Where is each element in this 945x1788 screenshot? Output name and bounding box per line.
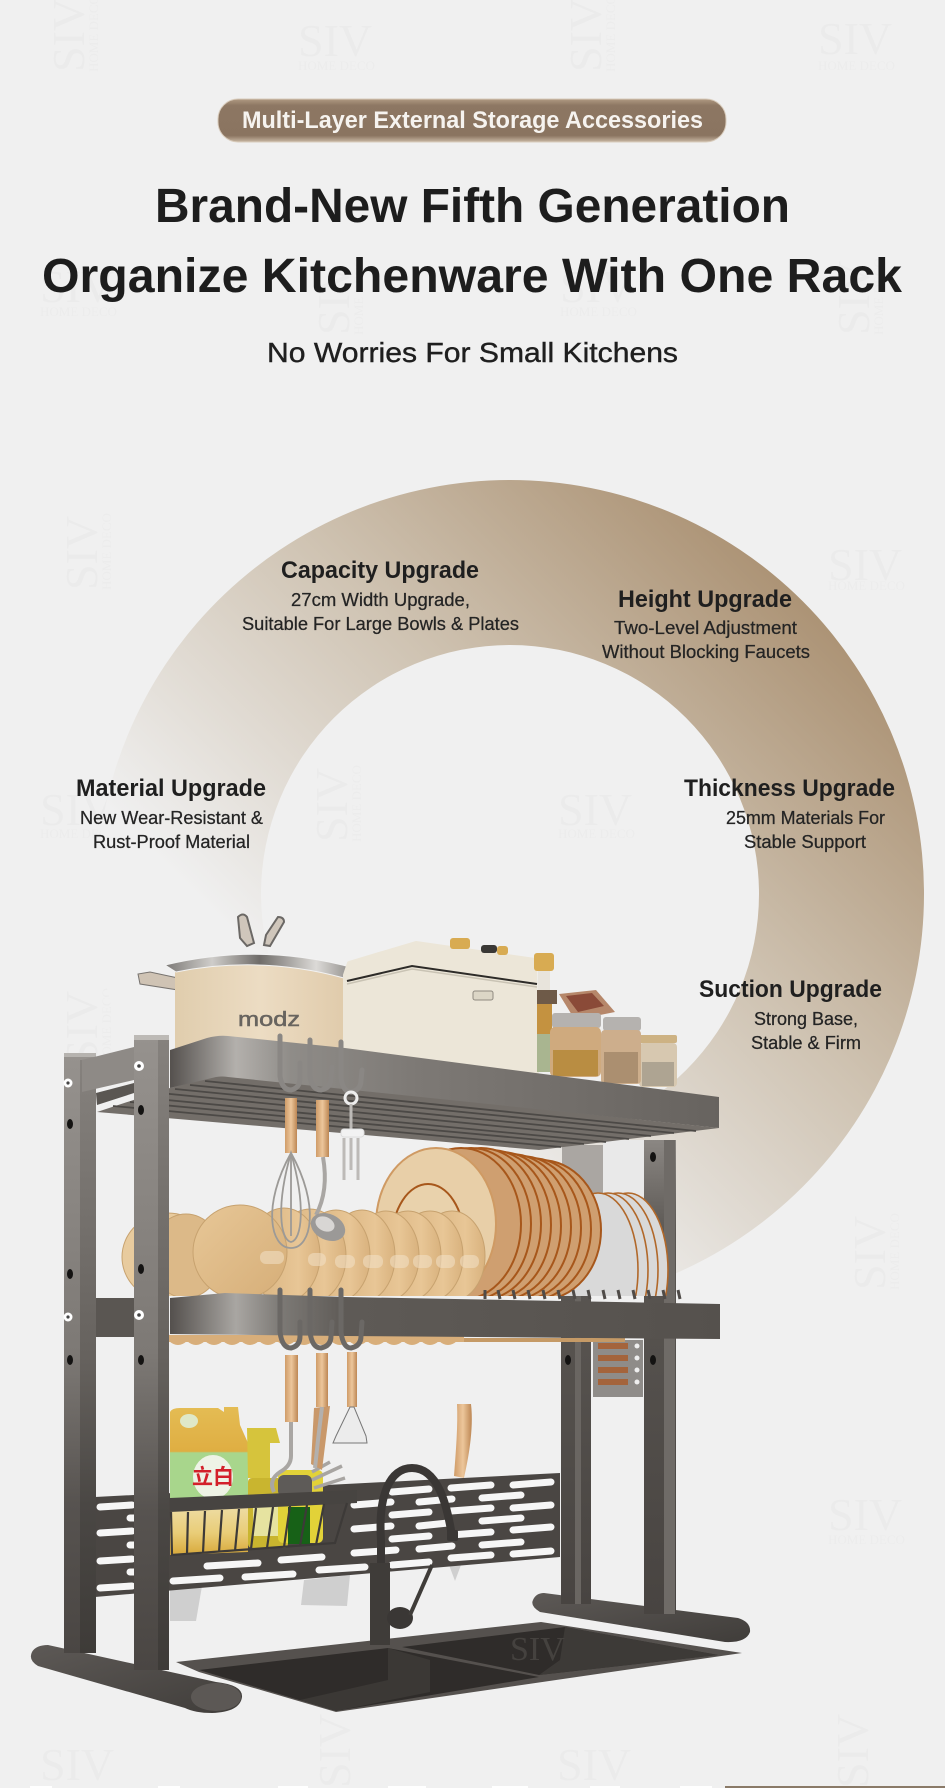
watermarks: HOME DECO bbox=[871, 258, 886, 335]
callout: material upgrade: Material Upgrade bbox=[76, 775, 266, 802]
stock pot: modz bbox=[238, 1009, 300, 1031]
watermarks: HOME DECO bbox=[298, 58, 375, 73]
callout: suction upgrade: Strong Base, bbox=[754, 1008, 858, 1029]
callout: material upgrade: New Wear-Resistant & bbox=[80, 807, 264, 828]
watermarks: HOME DECO bbox=[351, 258, 366, 335]
right base foot bbox=[532, 1593, 750, 1642]
title line 1: Brand-New Fifth Generation bbox=[155, 180, 790, 233]
callout: capacity upgrade bbox=[242, 557, 519, 634]
back rail mid shelf bbox=[96, 1298, 136, 1337]
callout: material upgrade: Rust-Proof Material bbox=[93, 831, 250, 852]
gradient ring bbox=[96, 480, 924, 1308]
faucet bbox=[370, 1468, 458, 1645]
watermarks: HOME DECO bbox=[99, 988, 114, 1065]
watermarks: HOME DECO bbox=[349, 765, 364, 842]
lower hooks bbox=[280, 1290, 362, 1348]
callout: material upgrade bbox=[76, 775, 266, 852]
back right post and light panel bbox=[561, 1140, 645, 1604]
middle shelf bbox=[170, 1293, 720, 1339]
stock pot bbox=[138, 914, 380, 1050]
callout: thickness upgrade: Thickness Upgrade bbox=[684, 775, 895, 802]
watermarks: SIV bbox=[309, 1714, 360, 1788]
watermarks: SIV bbox=[43, 0, 94, 72]
cream storage box bbox=[345, 938, 537, 1072]
watermarks: SIV bbox=[308, 261, 359, 335]
back rail top shelf bbox=[82, 1047, 134, 1105]
watermarks: SIV bbox=[298, 15, 372, 66]
hanging roller and brush bbox=[278, 1462, 345, 1497]
watermarks: HOME DECO bbox=[619, 513, 634, 590]
top shelf bbox=[97, 1036, 719, 1150]
corkscrew bbox=[341, 1092, 364, 1180]
callout: suction upgrade: Stable & Firm bbox=[751, 1032, 861, 1053]
knife handle bbox=[454, 1404, 472, 1478]
watermarks: HOME DECO bbox=[99, 513, 114, 590]
title line 2: Organize Kitchenware With One Rack bbox=[42, 250, 902, 303]
lower hanging utensils bbox=[272, 1352, 367, 1492]
watermarks: SIV bbox=[828, 1489, 902, 1540]
tan plates bbox=[376, 1148, 601, 1300]
watermarks: SIV bbox=[40, 261, 114, 312]
callout: suction upgrade: Suction Upgrade bbox=[699, 976, 882, 1003]
whisk bbox=[272, 1098, 310, 1248]
watermarks: HOME DECO bbox=[558, 826, 635, 841]
detergent jug bbox=[170, 1407, 248, 1555]
watermarks: SIV bbox=[828, 539, 902, 590]
left base foot bbox=[31, 1645, 242, 1713]
sink: SIV bbox=[510, 1631, 565, 1668]
watermarks: SIV bbox=[576, 516, 627, 590]
callout: thickness upgrade bbox=[684, 775, 895, 852]
watermarks: HOME DECO bbox=[818, 58, 895, 73]
subtitle: No Worries For Small Kitchens bbox=[267, 337, 678, 368]
watermarks: HOME DECO bbox=[887, 1213, 902, 1290]
back left post bbox=[64, 1053, 96, 1653]
watermarks: SIV bbox=[40, 784, 114, 835]
watermarks: HOME DECO bbox=[828, 1532, 905, 1547]
front right post bbox=[644, 1140, 676, 1614]
watermarks: HOME DECO bbox=[560, 304, 637, 319]
watermarks: SIV bbox=[306, 768, 357, 842]
watermarks: HOME DECO bbox=[828, 578, 905, 593]
tan edge under middle shelf bbox=[169, 1335, 625, 1345]
callout: height upgrade: Height Upgrade bbox=[618, 586, 792, 613]
callout: height upgrade: Without Blocking Faucets bbox=[602, 641, 810, 662]
watermarks: SIV bbox=[560, 261, 634, 312]
watermarks: HOME DECO bbox=[40, 826, 117, 841]
bowls stack bbox=[122, 1205, 485, 1303]
watermarks: SIV bbox=[560, 0, 611, 72]
top pill badge bbox=[218, 99, 726, 142]
callout: thickness upgrade: 25mm Materials For bbox=[726, 807, 885, 828]
chopstick holder bbox=[593, 1340, 643, 1397]
callout: capacity upgrade: Capacity Upgrade bbox=[281, 557, 479, 584]
spray bottle and sponge bbox=[247, 1428, 323, 1548]
watermarks: SIV bbox=[827, 1714, 878, 1788]
callout: height upgrade: Two-Level Adjustment bbox=[614, 617, 797, 638]
white plates bbox=[564, 1192, 669, 1296]
front left post bbox=[134, 1035, 169, 1670]
callout: capacity upgrade: Suitable For Large Bowls & Plates bbox=[242, 613, 519, 634]
spice bottle and pack bbox=[534, 953, 615, 1072]
detergent jug: 立白 bbox=[192, 1465, 234, 1489]
watermarks: SIV bbox=[558, 784, 632, 835]
product illustration: kitchen rack bbox=[31, 914, 750, 1713]
sink bbox=[176, 1622, 742, 1712]
watermarks: SIV bbox=[828, 261, 879, 335]
watermarks: SIV bbox=[818, 13, 892, 64]
top pill badge: Multi-Layer External Storage Accessories bbox=[242, 107, 703, 134]
callout: capacity upgrade: 27cm Width Upgrade, bbox=[291, 589, 470, 610]
watermarks: SIV bbox=[844, 1216, 895, 1290]
callout: height upgrade bbox=[602, 586, 810, 662]
watermarks: SIV bbox=[56, 516, 107, 590]
ladle spoon bbox=[306, 1100, 350, 1246]
wire basket bbox=[170, 1490, 357, 1555]
glass jars bbox=[550, 1013, 677, 1087]
callout: suction upgrade bbox=[699, 976, 882, 1053]
dish rack fingers bbox=[485, 1290, 680, 1299]
watermarks: SIV bbox=[56, 991, 107, 1065]
next section edge bbox=[30, 1786, 945, 1788]
callout: thickness upgrade: Stable Support bbox=[744, 831, 866, 852]
watermarks: HOME DECO bbox=[40, 304, 117, 319]
knife blades below panel bbox=[170, 1565, 461, 1621]
bowl highlights bbox=[260, 1251, 479, 1268]
perforated back panel bbox=[95, 1473, 560, 1597]
top hooks bbox=[280, 1036, 362, 1092]
